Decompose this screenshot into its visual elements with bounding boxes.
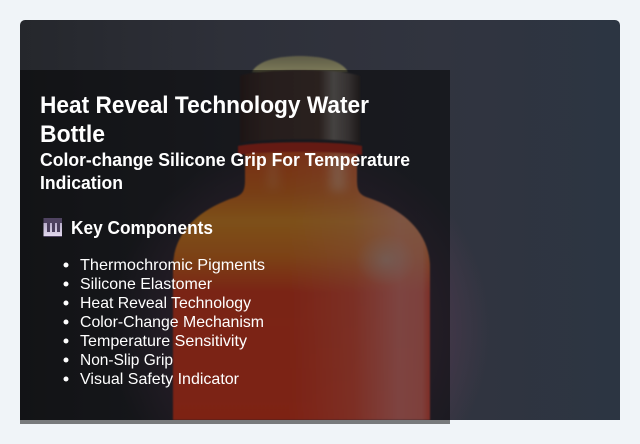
subtitle	[40, 150, 410, 193]
list: key components	[64, 257, 265, 388]
translucent text panel	[20, 70, 450, 424]
list: key components: Heat Reveal Technology	[80, 295, 251, 312]
list: key components: Non-Slip Grip	[80, 352, 173, 369]
list: key components: Color-Change Mechanism	[80, 314, 264, 331]
heading: key components: Key Components	[71, 218, 213, 238]
list: key components: Temperature Sensitivity	[80, 333, 247, 350]
list: key components: Visual Safety Indicator	[80, 371, 240, 388]
subtitle: Color-change Silicone Grip For Temperature	[40, 150, 410, 170]
list: key components: Thermochromic Pigments	[80, 257, 265, 274]
title	[40, 92, 369, 148]
list: key components: Silicone Elastomer	[80, 276, 213, 293]
subtitle: Indication	[40, 173, 123, 193]
title: Bottle	[40, 121, 105, 148]
icon: piano keys	[44, 218, 62, 237]
title: Heat Reveal Technology Water	[40, 92, 369, 119]
